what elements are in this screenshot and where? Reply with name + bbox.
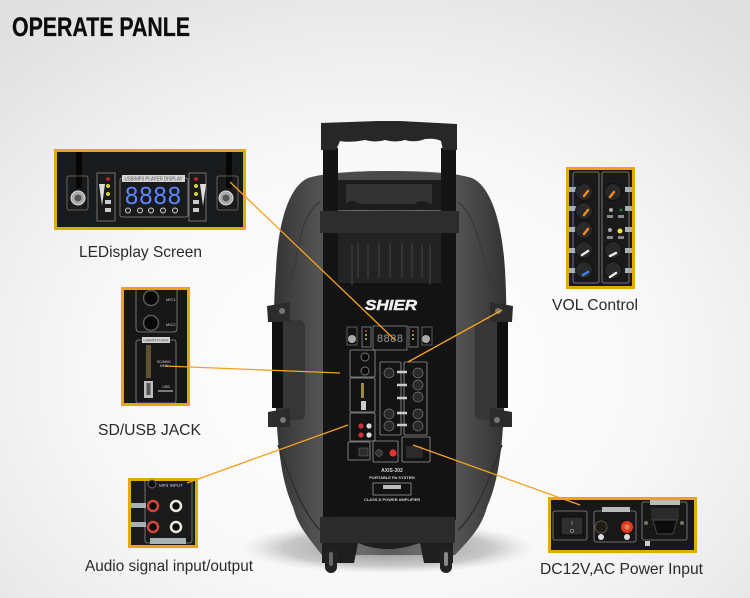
- AC inlet: [642, 500, 687, 546]
- panel: SD/USB jack: [122, 288, 188, 404]
- model text block: [364, 468, 420, 502]
- speakon jacks: [67, 152, 238, 210]
- power label: DC12V,AC Power Input: [540, 561, 704, 578]
- RCA jacks: [148, 501, 181, 532]
- panel: DC12V / AC power input: [550, 498, 696, 552]
- back panel: [338, 233, 441, 517]
- USB/MP3 player box: USB: [162, 385, 170, 389]
- leader lines: [165, 182, 580, 505]
- model text block: CLASS D POWER AMPLIFIER: [364, 497, 420, 502]
- mic jacks: MIC2: [166, 322, 176, 327]
- base and wheels: [320, 517, 455, 573]
- panel jacks and controls: [358, 353, 423, 458]
- ground shadow: [238, 522, 538, 574]
- speaker with trolley: [267, 121, 513, 573]
- knob pointers: [582, 191, 616, 277]
- brand logo: SHIER: [365, 297, 417, 314]
- model text block: AXIS-302: [381, 468, 403, 474]
- panel: VOL control: [568, 168, 634, 288]
- VOL label: VOL Control: [552, 297, 638, 314]
- left side handle: [267, 302, 305, 427]
- power switch: O: [570, 529, 574, 535]
- top carry handle: [336, 171, 442, 210]
- side tabs: [131, 503, 186, 544]
- control frames: [573, 172, 629, 283]
- knobs: [576, 184, 622, 278]
- SD/USB label: SD/USB JACK: [98, 422, 201, 439]
- USB/MP3 player box: SD/MMC: [157, 360, 172, 364]
- trolley rails: [323, 148, 456, 520]
- model text block: PORTABLE PA SYSTEM: [369, 475, 415, 480]
- audio label: Audio signal input/output: [85, 558, 254, 575]
- power switch: I: [571, 521, 573, 527]
- mic jacks: MIC1: [166, 297, 176, 302]
- title: OPERATE PANLE: [12, 12, 190, 42]
- jack boxes on panel: [348, 350, 430, 462]
- frame: [145, 481, 192, 543]
- middle buttons: [607, 208, 624, 239]
- trolley top handle: [321, 121, 457, 150]
- USB/MP3 player box: USB/MP3 PLAYER: [144, 338, 169, 342]
- LED label: LEDisplay Screen: [79, 244, 202, 261]
- power switch: [553, 511, 587, 540]
- LED display on panel: 8888: [377, 334, 403, 346]
- USB/MP3 player box: [136, 337, 176, 403]
- blue digits: 8888: [124, 182, 182, 212]
- level meters: [97, 173, 206, 221]
- panel: audio signal input/output: [130, 480, 196, 546]
- right side handle: [475, 302, 513, 427]
- display header: USB/MP3 PLAYER DISPLAY: [124, 176, 183, 182]
- mic jacks: [136, 290, 177, 332]
- control buttons: [126, 208, 178, 213]
- speaker body: [274, 171, 506, 555]
- side tabs: [569, 187, 632, 273]
- DC battery posts: [594, 507, 636, 542]
- USB/MP3 player box: MMC: [160, 364, 169, 368]
- LED display on panel: [347, 326, 432, 350]
- MP3 input jack: MP3 INPUT: [159, 483, 183, 488]
- display header: [120, 175, 188, 217]
- panel: LED display screen: [56, 150, 244, 228]
- rail collar: [320, 211, 459, 233]
